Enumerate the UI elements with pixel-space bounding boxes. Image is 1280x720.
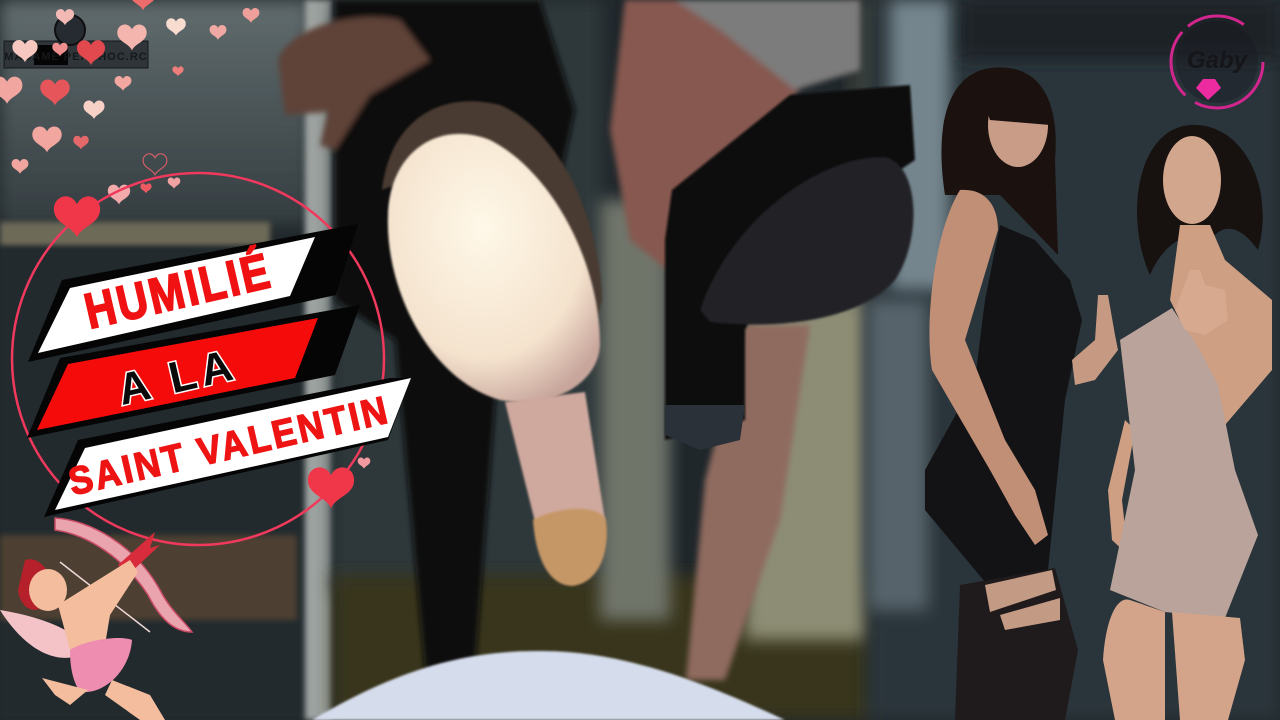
banner 3: Saint Valentin: SAINT VALENTIN bbox=[65, 389, 394, 504]
banner 1: Humilié: HUMILIÉ bbox=[79, 242, 277, 340]
white foreground mound bbox=[312, 651, 785, 720]
banner 2: A la bbox=[27, 305, 360, 438]
title banners bbox=[27, 224, 411, 517]
blurred standing figure, left bbox=[278, 0, 575, 670]
logo: Gaby circle: Gaby bbox=[1187, 47, 1249, 74]
light shoe sole bbox=[382, 101, 607, 586]
icon: cupid with bow bbox=[0, 518, 192, 720]
banner 2: A la: A LA bbox=[113, 340, 242, 415]
logo: Gaby circle bbox=[1171, 16, 1263, 108]
blurred standing figure, centre bbox=[610, 0, 860, 680]
person in black dress bbox=[925, 67, 1118, 720]
watermark bbox=[4, 15, 148, 68]
watermark: MADAME PEACHOC.RC bbox=[4, 51, 148, 63]
dark shoe sole bbox=[665, 85, 915, 450]
banner 1: Humilié bbox=[28, 224, 358, 362]
decorative circle with red hearts bbox=[12, 154, 384, 545]
scattered pink hearts, top left bbox=[0, 0, 259, 204]
person in beige dress bbox=[1103, 125, 1272, 720]
